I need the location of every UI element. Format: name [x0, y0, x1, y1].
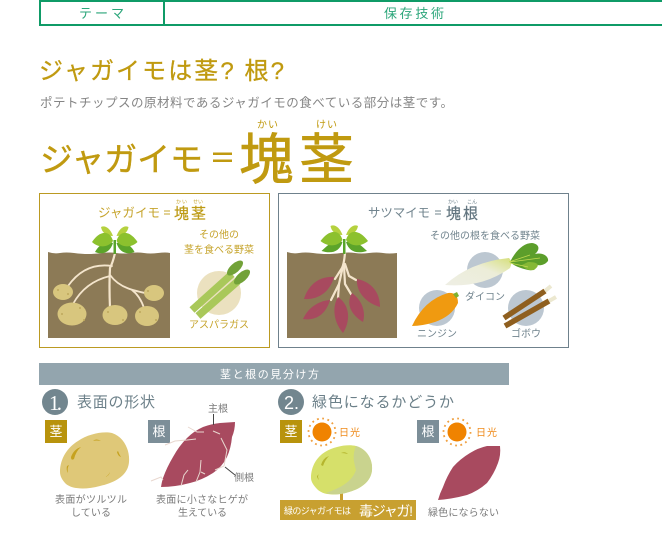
panel heading: sweet potato: こん — [467, 200, 477, 206]
sweet potato caption — [156, 493, 248, 519]
tag: stem — [280, 420, 302, 443]
panel: potato stem tuber — [40, 194, 270, 348]
banner: poisonous potato: 毒ジャガ! — [359, 503, 413, 519]
icon: sun — [308, 418, 336, 446]
potato caption — [55, 493, 127, 519]
panel heading: potato — [98, 198, 206, 222]
icon: asparagus — [192, 258, 252, 316]
sweet potato caption: 表面に小さなヒゲが — [156, 493, 248, 506]
soil with sweet potatoes and roots — [287, 252, 397, 338]
title: ジャガイモは茎? 根? — [39, 58, 284, 85]
heading: turning green — [278, 389, 454, 415]
section band — [39, 363, 509, 385]
heading: surface shape: 表面の形状 — [77, 394, 155, 411]
header bar — [40, 0, 662, 26]
icon: carrot — [412, 290, 459, 326]
label: daikon: ダイコン — [465, 290, 505, 303]
label: asparagus: アスパラガス — [189, 319, 249, 331]
label: side root: 側根 — [234, 471, 254, 484]
potato illustration — [60, 432, 129, 488]
sweet potato illustration — [151, 422, 235, 487]
label: side root — [225, 467, 254, 484]
label: sunlight: 日光 — [476, 426, 497, 439]
section band: 茎と根の見分け方 — [220, 367, 319, 381]
potato caption: している — [71, 507, 111, 519]
purple sweet potato illustration — [438, 446, 500, 500]
caption: does not turn green: 緑色にならない — [428, 506, 499, 519]
section 2: turning green — [278, 389, 500, 520]
heading: turning green: 緑色になるかどうか — [312, 394, 454, 411]
label: carrot: ニンジン — [417, 329, 457, 340]
panel heading: sweet potato — [368, 198, 478, 222]
panel heading: sweet potato: かい — [448, 198, 458, 206]
headline equation — [40, 119, 354, 191]
label: other root vegetables: その他の根を食べる野菜 — [430, 229, 540, 242]
panel heading: sweet potato: 塊根 — [446, 206, 478, 222]
icon: sun — [444, 418, 470, 446]
tag: stem: 茎 — [50, 424, 63, 439]
panel heading: sweet potato: サツマイモ — [368, 206, 430, 220]
headline equation: けい — [316, 119, 337, 131]
tag: stem: 茎 — [284, 424, 298, 439]
headline equation: 茎 — [299, 129, 354, 191]
panel heading: potato: ジャガイモ — [98, 206, 160, 220]
tag: root: 根 — [152, 424, 166, 439]
heading: surface shape — [42, 389, 155, 415]
label: other stem vegetables — [184, 228, 254, 256]
panel: sweet potato root tuber — [278, 194, 568, 348]
panel heading: potato: かい — [176, 198, 187, 206]
label: sunlight: 日光 — [339, 426, 360, 439]
icon: burdock — [504, 286, 556, 326]
intro text: ポテトチップスの原材料であるジャガイモの食べている部分は茎です。 — [40, 96, 453, 110]
tag: root — [417, 420, 439, 443]
banner: poisonous potato: 緑のジャガイモは — [284, 505, 351, 516]
banner: poisonous potato — [280, 500, 416, 520]
header bar: 保存技術 — [384, 6, 444, 21]
label: burdock: ゴボウ — [511, 327, 541, 340]
header bar: テーマ — [79, 6, 124, 21]
soil with roots and potatoes — [48, 252, 170, 338]
tag: root — [148, 420, 170, 443]
headline equation: かい — [257, 119, 278, 131]
tag: root: 根 — [422, 424, 435, 439]
icon: potato sprout leaves — [92, 226, 138, 254]
label: other stem vegetables: その他の — [199, 228, 239, 241]
green potato illustration — [311, 445, 372, 501]
label: main root: 主根 — [208, 402, 228, 415]
label: other stem vegetables: 茎を食べる野菜 — [184, 244, 254, 256]
section 1: surface shape — [42, 389, 254, 519]
headline equation: ジャガイモ — [40, 141, 203, 178]
potato caption: 表面がツルツル — [55, 493, 127, 506]
heading: surface shape: 1. — [49, 391, 62, 415]
sweet potato caption: 生えている — [178, 506, 227, 519]
heading: turning green: 2. — [284, 393, 299, 413]
panel heading: potato: せい — [193, 200, 203, 206]
tag: stem — [45, 420, 67, 443]
headline equation: 塊 — [239, 129, 294, 191]
icon: sweet potato sprout leaves — [320, 225, 368, 254]
panel heading: potato: 塊茎 — [174, 206, 206, 222]
label: main root — [208, 402, 228, 425]
icon: daikon — [445, 243, 548, 288]
